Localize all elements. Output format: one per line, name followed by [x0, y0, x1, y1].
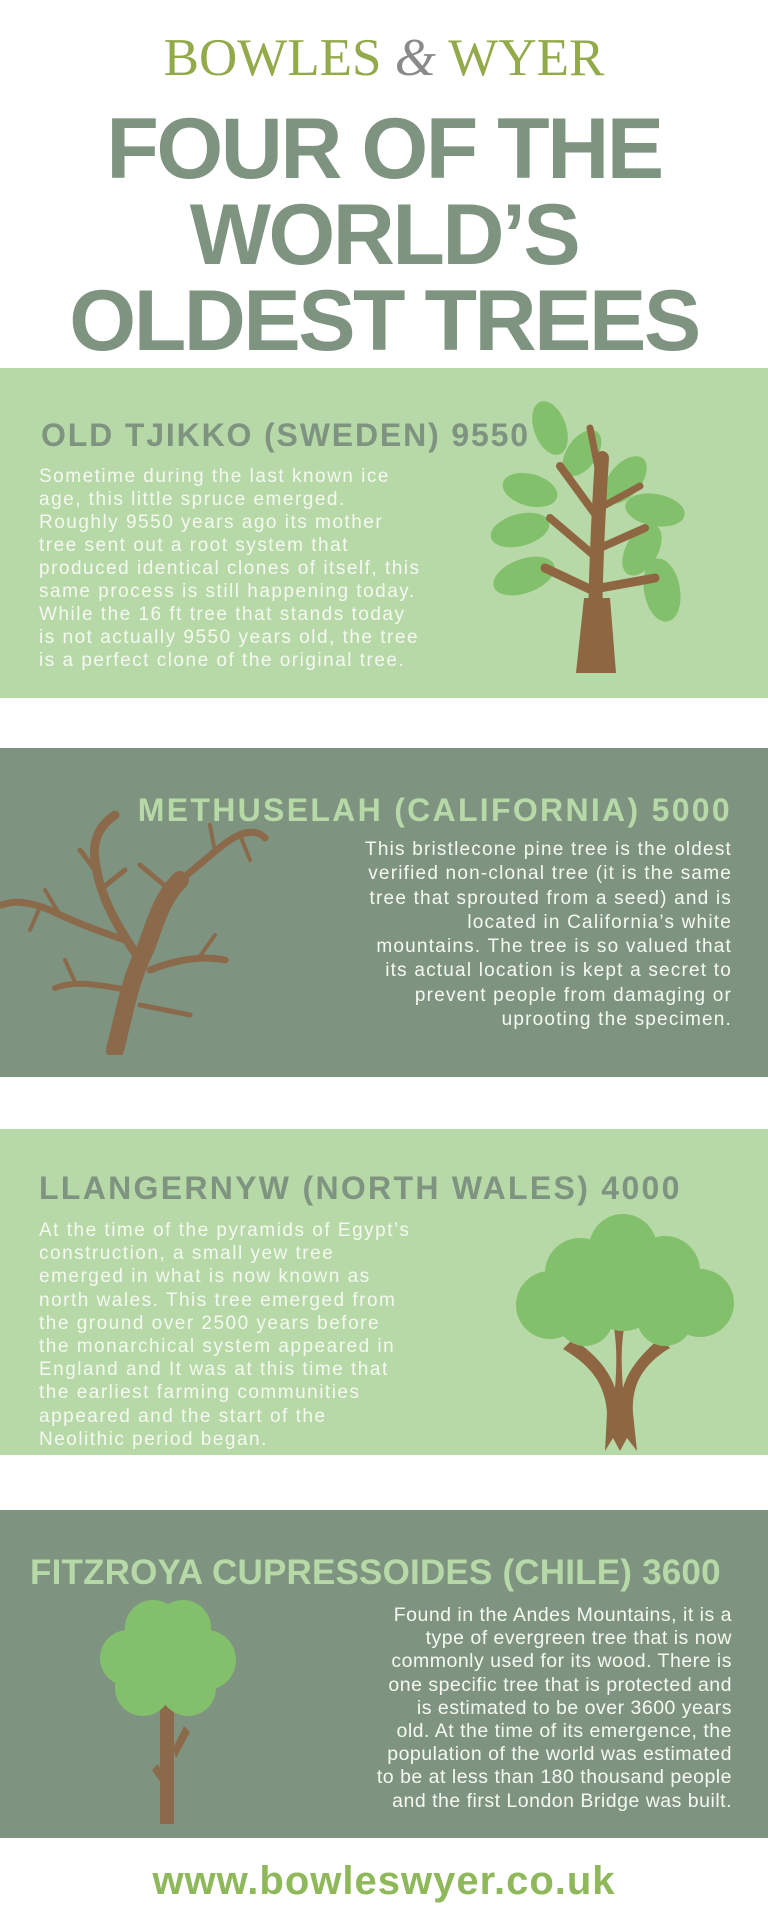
heading: Methuselah: METHUSELAH (CALIFORNIA) 5000	[138, 792, 732, 828]
text: Fitzroya description: is estimated to be over 3600 years	[417, 1697, 732, 1719]
text: Methuselah description	[365, 839, 732, 1030]
text: Old Tjikko description: is a perfect clone of the original tree.	[39, 650, 405, 671]
title	[69, 101, 699, 369]
text: Fitzroya description: type of evergreen tree that is now	[426, 1627, 732, 1649]
text: Old Tjikko description: Roughly 9550 years ago its mother	[39, 512, 383, 533]
text: Llangernyw description	[39, 1220, 410, 1450]
text: Fitzroya description: Found in the Andes Mountains, it is a	[394, 1604, 732, 1626]
footer url: www.bowleswyer.co.uk	[152, 1859, 616, 1903]
text: Fitzroya description: and the first London Bridge was built.	[392, 1790, 732, 1812]
text: Llangernyw description: construction, a small yew tree	[39, 1243, 334, 1264]
text: Llangernyw description: the monarchical system appeared in	[39, 1336, 395, 1357]
text: Methuselah description: tree that sprouted from a seed) and is	[370, 888, 732, 909]
text: Llangernyw description: north wales. This tree emerged from	[39, 1290, 396, 1311]
text: Old Tjikko description: While the 16 ft tree that stands today	[39, 604, 405, 625]
text: Old Tjikko description: tree sent out a root system that	[39, 535, 349, 556]
text: Llangernyw description: Neolithic period began.	[39, 1429, 268, 1450]
panel: Old Tjikko	[0, 368, 768, 698]
text: Methuselah description: This bristlecone pine tree is the oldest	[365, 839, 732, 860]
title: FOUR OF THE	[106, 101, 662, 197]
heading: Fitzroya: FITZROYA CUPRESSOIDES (CHILE) 3600	[30, 1553, 721, 1592]
logo: BOWLES & WYER	[164, 29, 604, 87]
text: Fitzroya description: population of the world was estimated	[387, 1743, 732, 1765]
title: WORLD’S	[190, 187, 578, 283]
text: Methuselah description: verified non-clonal tree (it is the same	[368, 863, 732, 884]
icon: leafy spruce tree	[490, 401, 685, 673]
panel: Fitzroya	[0, 1510, 768, 1838]
text: Llangernyw description: appeared and the start of the	[39, 1406, 327, 1427]
heading: Old Tjikko: OLD TJIKKO (SWEDEN) 9550	[41, 417, 530, 453]
icon: gnarled bristlecone pine	[0, 810, 268, 1055]
text: Methuselah description: prevent people from damaging or	[415, 985, 732, 1006]
text: Fitzroya description: one specific tree that is protected and	[388, 1674, 732, 1696]
text: Old Tjikko description: same process is still happening today.	[39, 581, 416, 602]
text: Fitzroya description: commonly used for its wood. There is	[391, 1650, 732, 1672]
text: Old Tjikko description: is not actually 9550 years old, the tree	[39, 627, 419, 648]
text: Fitzroya description: old. At the time of its emergence, the	[396, 1720, 732, 1742]
text: Methuselah description: located in California’s white	[467, 912, 732, 933]
text: Old Tjikko description: Sometime during the last known ice	[39, 466, 390, 487]
title: OLDEST TREES	[69, 273, 699, 369]
text: Old Tjikko description: age, this little spruce emerged.	[39, 489, 346, 510]
text: Fitzroya description: to be at less than 180 thousand people	[377, 1766, 732, 1788]
text: Llangernyw description: At the time of the pyramids of Egypt’s	[39, 1220, 410, 1241]
icon: yew tree	[516, 1214, 734, 1451]
text: Llangernyw description: the ground over 2500 years before	[39, 1313, 380, 1334]
heading: Llangernyw: LLANGERNYW (NORTH WALES) 4000	[39, 1170, 682, 1206]
text: Old Tjikko description: produced identical clones of itself, this	[39, 558, 421, 579]
text: Fitzroya description	[377, 1604, 732, 1812]
text: Methuselah description: mountains. The tree is so valued that	[376, 936, 732, 957]
panel: Llangernyw	[0, 1129, 768, 1455]
text: Old Tjikko description	[39, 466, 421, 671]
text: Llangernyw description: the earliest farming communities	[39, 1382, 360, 1403]
text: Llangernyw description: emerged in what is now known as	[39, 1266, 371, 1287]
text: Methuselah description: its actual location is kept a secret to	[385, 960, 732, 981]
text: Llangernyw description: England and It was at this time that	[39, 1359, 389, 1380]
text: Methuselah description: uprooting the specimen.	[502, 1009, 732, 1030]
panel: Methuselah	[0, 748, 768, 1077]
icon: tall thin tree	[100, 1600, 236, 1824]
